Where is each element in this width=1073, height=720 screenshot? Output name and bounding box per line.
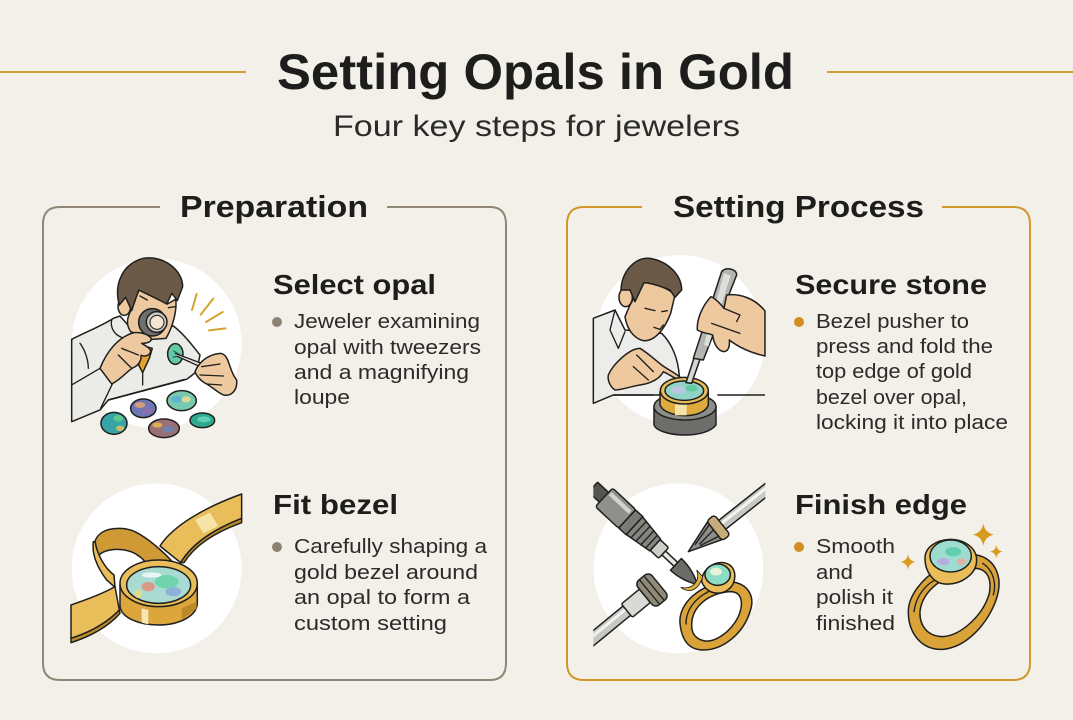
illustration: jeweler pressing bezel [593, 255, 765, 435]
bullet: secure stone: Bezel pusher to [816, 311, 969, 333]
bullet: select opal: Jeweler examining [294, 311, 480, 333]
illustration: jeweler examining opal [72, 258, 242, 438]
bullet: secure stone [794, 311, 1008, 434]
bullet: secure stone: top edge of gold [816, 361, 972, 383]
step title: select opal: Select opal [273, 269, 436, 300]
bullet: finish edge: and [816, 562, 853, 584]
bullet: fit bezel [272, 536, 488, 635]
heading: setting process: Setting Process [673, 189, 924, 224]
bullet: secure stone: locking it into place [816, 412, 1008, 434]
bullet: finish edge: finished [816, 613, 895, 635]
panel: setting process [567, 189, 1030, 680]
bullet: select opal: and a magnifying [294, 362, 469, 384]
bullet: secure stone: press and fold the [816, 336, 993, 358]
bullet: fit bezel: an opal to form a [294, 587, 471, 609]
bullet: finish edge: Smooth [816, 536, 895, 558]
bullet: fit bezel: Carefully shaping a [294, 536, 488, 558]
illustration: gold bezel around opal [71, 483, 242, 653]
bullet: select opal: opal with tweezers [294, 337, 481, 359]
step title: finish edge: Finish edge [795, 489, 967, 520]
bullet: select opal [272, 311, 481, 409]
step title: secure stone: Secure stone [795, 269, 987, 300]
bullet: fit bezel: custom setting [294, 613, 447, 635]
subtitle: Four key steps for jewelers [333, 110, 740, 143]
illustration: polishing tools and ring [593, 482, 766, 654]
bullet: select opal: loupe [294, 387, 350, 409]
bullet: secure stone: bezel over opal, [816, 387, 967, 409]
illustration: finished opal ring [900, 523, 1003, 649]
panel: preparation [43, 189, 506, 680]
step title: fit bezel: Fit bezel [273, 489, 398, 520]
title: Setting Opals in Gold [277, 44, 794, 100]
bullet: finish edge: polish it [816, 587, 894, 609]
bullet: finish edge [794, 536, 895, 635]
bullet: fit bezel: gold bezel around [294, 562, 478, 584]
heading: preparation: Preparation [180, 189, 368, 224]
